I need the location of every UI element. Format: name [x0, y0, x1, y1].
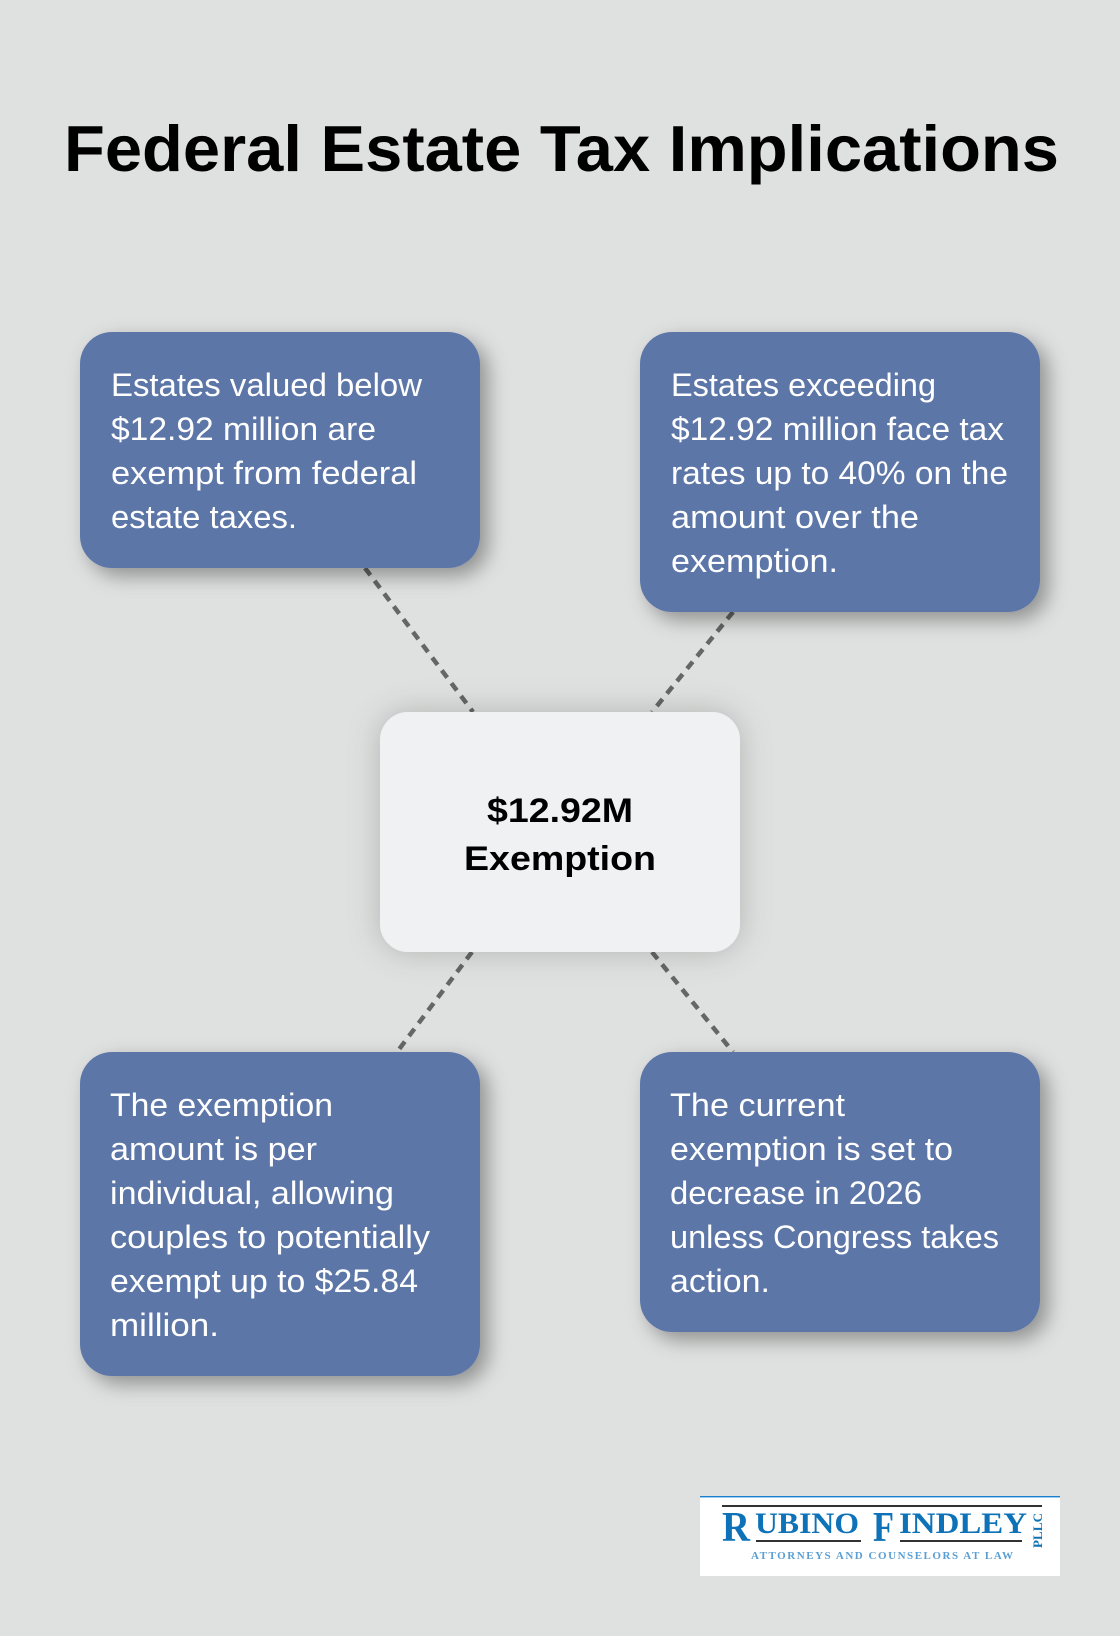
panel: per individual: individual, allowing — [110, 1175, 394, 1211]
panel: 2026 decrease: exemption is set to — [670, 1131, 953, 1167]
logo: Rubino Findley: ATTORNEYS AND COUNSELORS AT LAW — [751, 1550, 1013, 1562]
panel: 2026 decrease: action. — [670, 1263, 770, 1299]
logo: Rubino Findley: PLLC — [1030, 1513, 1045, 1548]
panel: 2026 decrease — [640, 1052, 1040, 1332]
title: Federal Estate Tax Implications — [64, 112, 1059, 185]
panel: below exemption: Estates valued below — [111, 367, 423, 403]
logo: Rubino Findley — [700, 1496, 1060, 1576]
panel: per individual: amount is per — [110, 1131, 317, 1167]
panel: center exemption: $12.92M — [487, 792, 633, 830]
panel: above exemption: $12.92 million face tax — [671, 411, 1004, 447]
logo: Rubino Findley: R — [722, 1505, 751, 1551]
logo: Rubino Findley: UBINO — [755, 1507, 859, 1540]
panel: below exemption: estate taxes. — [111, 499, 297, 535]
panel: center exemption: Exemption — [464, 840, 656, 878]
panel: center exemption — [380, 712, 740, 952]
panel: above exemption: rates up to 40% on the — [671, 455, 1008, 491]
panel: below exemption: $12.92 million are — [111, 411, 376, 447]
panel: below exemption: exempt from federal — [111, 455, 417, 491]
logo: Rubino Findley: INDLEY — [899, 1507, 1027, 1540]
panel: above exemption: Estates exceeding — [671, 367, 936, 403]
panel: 2026 decrease: unless Congress takes — [670, 1219, 999, 1255]
panel: below exemption — [80, 332, 480, 568]
panel: per individual: exempt up to $25.84 — [110, 1263, 418, 1299]
panel: per individual: The exemption — [110, 1087, 333, 1123]
dashed connectors — [365, 568, 733, 1052]
panel: above exemption: amount over the — [671, 499, 919, 535]
panel: 2026 decrease: decrease in 2026 — [670, 1175, 922, 1211]
panel: 2026 decrease: The current — [670, 1087, 845, 1123]
logo: Rubino Findley: F — [873, 1505, 894, 1551]
panel: above exemption: exemption. — [671, 543, 838, 579]
panel: per individual — [80, 1052, 480, 1376]
panel: above exemption — [640, 332, 1040, 612]
panel: per individual: million. — [110, 1307, 219, 1343]
panel: per individual: couples to potentially — [110, 1219, 431, 1255]
